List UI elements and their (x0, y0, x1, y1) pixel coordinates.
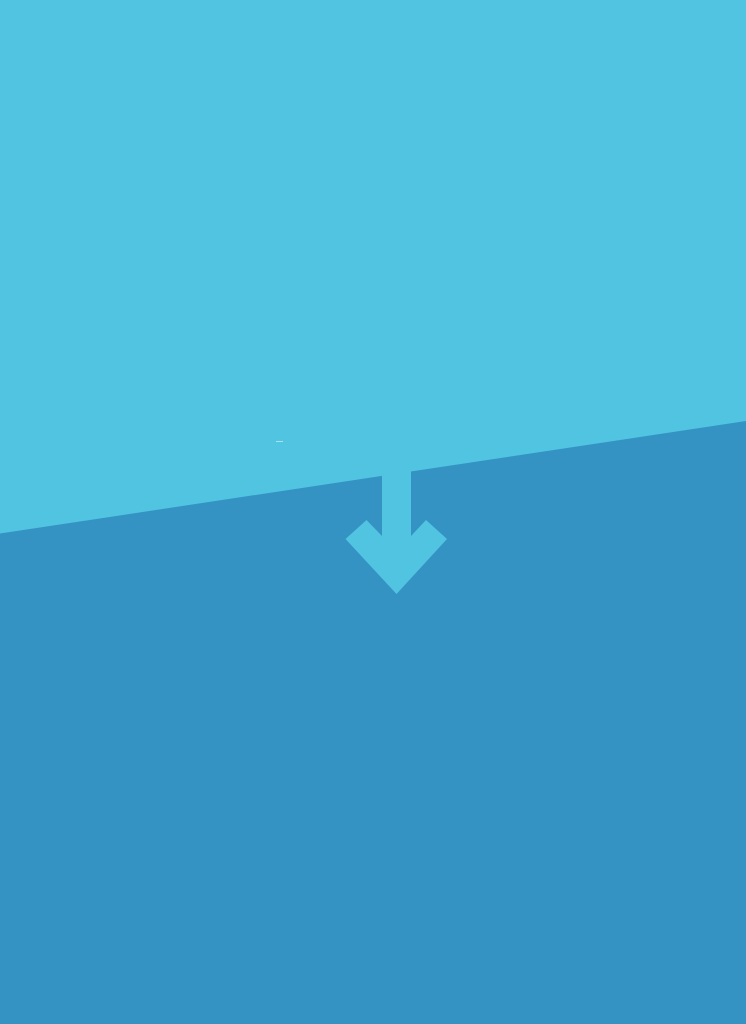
panel: upper light blue slanted section (0, 0, 746, 534)
icon: down arrow (346, 465, 447, 594)
small pale mark (276, 441, 283, 442)
